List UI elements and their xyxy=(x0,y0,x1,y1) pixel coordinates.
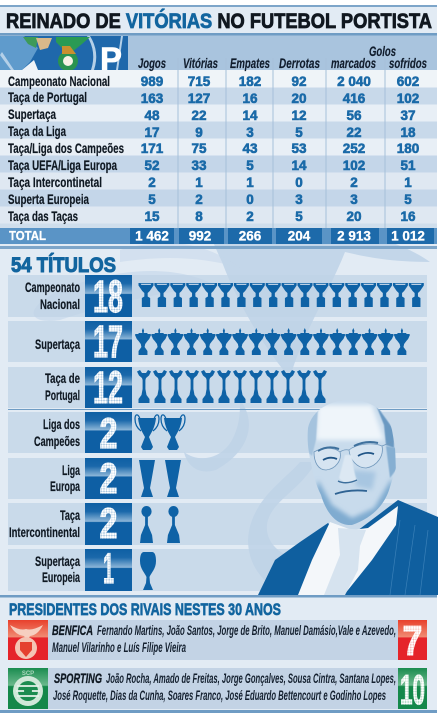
table row: Taça da Liga: 22 xyxy=(346,125,362,140)
table row: Supertaça: Supertaça xyxy=(8,106,56,122)
title row: Taça de Portugal 12 xyxy=(45,362,327,413)
table row: Taça da Liga xyxy=(8,123,416,140)
table row: Taça Intercontinetal: Taça Intercontinetal xyxy=(8,174,102,190)
table row: Superta Europeia: 3 xyxy=(295,192,303,207)
table row: Taça da Liga: 18 xyxy=(400,125,416,140)
title row: Liga Europa 2: 2 xyxy=(100,455,118,503)
title row: Taça Intercontinental 2 xyxy=(9,500,180,548)
table row: Superta Europeia: Superta Europeia xyxy=(8,191,89,207)
title row: Liga Europa 2: Europa xyxy=(50,478,80,494)
table row: Supertaça: 14 xyxy=(242,108,258,123)
table row: Taça de Portugal: 102 xyxy=(397,91,419,106)
panel: Sporting xyxy=(8,666,427,713)
title row: Liga dos Campeões 2: Campeões xyxy=(34,433,80,449)
title row: Liga dos Campeões 2: Liga dos xyxy=(43,416,80,432)
title row: Taça Intercontinental 2: 2 xyxy=(100,500,118,548)
table row: Superta Europeia xyxy=(8,191,412,207)
crest: Benfica xyxy=(8,620,48,660)
heading: presidents of rivals: PRESIDENTES DOS RIVAIS NESTES 30 ANOS xyxy=(9,600,281,619)
table column headers xyxy=(138,43,427,71)
table row: Taça/Liga dos Campeões: 252 xyxy=(343,141,365,156)
table row: Supertaça: 12 xyxy=(291,108,307,123)
table row: Taça UEFA/Liga Europa xyxy=(8,157,416,173)
title row: Campeonato Nacional 18 xyxy=(25,271,424,322)
table row: Taça Intercontinetal: 0 xyxy=(295,175,303,190)
table total row: 1 462 xyxy=(135,228,169,244)
table row: Supertaça: 22 xyxy=(191,108,207,123)
table row: Taça das Taças: Taça das Taças xyxy=(8,208,78,224)
table row: Superta Europeia: 5 xyxy=(404,192,412,207)
table row: Campeonato Nacional: 182 xyxy=(239,74,261,89)
crest: Sporting: SCP xyxy=(22,671,34,677)
table row: Taça Intercontinetal: 2 xyxy=(350,175,358,190)
table row: Taça UEFA/Liga Europa: 14 xyxy=(291,158,307,173)
table row: Taça UEFA/Liga Europa: 102 xyxy=(343,158,365,173)
title row: Liga Europa 2: Liga xyxy=(62,462,80,478)
title row: Taça Intercontinental 2: Taça xyxy=(60,507,80,523)
table row: Taça UEFA/Liga Europa: Taça UEFA/Liga Europa xyxy=(8,157,117,173)
table row: Taça de Portugal xyxy=(8,89,419,106)
table total row: 266 xyxy=(239,228,262,244)
table row: Taça da Liga: 5 xyxy=(295,125,303,140)
heading: 54 títulos: 54 TÍTULOS xyxy=(11,254,116,277)
table row: Superta Europeia: 2 xyxy=(195,192,203,207)
panel: Sporting: SPORTING xyxy=(54,670,102,686)
table row: Taça/Liga dos Campeões: 43 xyxy=(242,141,258,156)
table row: Campeonato Nacional: 715 xyxy=(188,74,211,89)
table row: Taça de Portugal: Taça de Portugal xyxy=(8,89,87,105)
table column headers: Empates xyxy=(230,55,270,71)
panel: Benfica xyxy=(8,617,427,664)
table row: Taça Intercontinetal: 2 xyxy=(148,175,156,190)
header image: club logo and P: P xyxy=(100,41,122,77)
table row: Taça de Portugal: 127 xyxy=(188,91,210,106)
table row: Taça UEFA/Liga Europa: 52 xyxy=(144,158,160,173)
table row: Taça da Liga: 9 xyxy=(195,125,203,140)
table row: Taça das Taças: 15 xyxy=(144,209,160,224)
table row: Superta Europeia: 3 xyxy=(350,192,358,207)
table row: Campeonato Nacional: 92 xyxy=(291,74,307,89)
table total row: 2 913 xyxy=(337,228,371,244)
table total row: TOTAL xyxy=(9,228,46,243)
table row: Supertaça: 37 xyxy=(400,108,416,123)
table total row: 1 012 xyxy=(391,228,425,244)
title row: Supertaça 17: Supertaça xyxy=(35,336,80,352)
table row: Taça das Taças: 8 xyxy=(195,209,203,224)
title row: Supertaça Europeia 1: 1 xyxy=(103,545,114,593)
title row: Campeonato Nacional 18: Nacional xyxy=(40,296,80,312)
table panel xyxy=(0,33,437,244)
table column headers: marcados xyxy=(331,55,376,71)
title row: Taça de Portugal 12: 12 xyxy=(93,362,123,413)
table rows striping xyxy=(0,58,437,228)
header image: club logo and P xyxy=(0,36,128,77)
title row: Taça de Portugal 12: Taça de xyxy=(45,370,80,386)
portrait: president in suit xyxy=(258,400,438,595)
table column headers: Jogos xyxy=(138,55,166,71)
title row: Taça Intercontinental 2: Intercontinental xyxy=(9,524,80,540)
title row: Supertaça Europeia 1: Europeia xyxy=(42,569,80,585)
table row: Taça de Portugal: 416 xyxy=(343,91,366,106)
table row: Taça/Liga dos Campeões: 171 xyxy=(141,141,164,156)
table row: Taça/Liga dos Campeões: 180 xyxy=(397,141,419,156)
title row: Liga dos Campeões 2: 2 xyxy=(100,410,118,458)
title row: Supertaça 17: 17 xyxy=(93,316,123,367)
crest: Sporting xyxy=(8,668,48,709)
title row: Campeonato Nacional 18: Campeonato xyxy=(25,279,80,295)
titles rows backgrounds xyxy=(8,275,427,591)
table row: Taça Intercontinetal: 1 xyxy=(195,175,203,190)
table row: Taça das Taças: 16 xyxy=(400,209,416,224)
table row: Supertaça: 48 xyxy=(144,108,160,123)
table row: Taça das Taças: 2 xyxy=(246,209,254,224)
title row: Supertaça 17 xyxy=(35,316,410,367)
table total row: 204 xyxy=(288,228,311,244)
table row: Taça UEFA/Liga Europa: 51 xyxy=(400,158,416,173)
table row: Superta Europeia: 0 xyxy=(246,192,254,207)
table row: Taça de Portugal: 20 xyxy=(291,91,307,106)
top rule xyxy=(0,5,437,7)
section rule xyxy=(0,246,437,249)
table header background xyxy=(0,33,437,70)
title row: Campeonato Nacional 18: 18 xyxy=(93,271,123,322)
title row: Liga dos Campeões 2 xyxy=(34,410,185,458)
table column headers: Derrotas xyxy=(279,55,320,71)
title row: Supertaça Europeia 1: Supertaça xyxy=(35,553,80,569)
section rule xyxy=(0,595,437,598)
table row: Taça Intercontinetal xyxy=(8,174,412,190)
title row: Supertaça Europeia 1 xyxy=(35,545,156,593)
table row: Campeonato Nacional xyxy=(8,73,419,89)
table row: Taça de Portugal: 16 xyxy=(242,91,258,106)
table row: Taça de Portugal: 163 xyxy=(141,91,164,106)
title row: Liga Europa 2 xyxy=(50,455,181,503)
table row: Taça da Liga: 17 xyxy=(144,125,160,140)
table row: Taça/Liga dos Campeões: 75 xyxy=(191,141,207,156)
dragon watermark xyxy=(34,130,430,594)
title row: Taça de Portugal 12: Portugal xyxy=(45,387,80,403)
panel: Benfica: BENFICA xyxy=(52,622,93,638)
table row: Taça/Liga dos Campeões: Taça/Liga dos Campeões xyxy=(8,140,124,156)
table row: Taça das Taças: 20 xyxy=(346,209,362,224)
table column headers: Golos xyxy=(369,43,396,59)
table row: Supertaça: 56 xyxy=(346,108,362,123)
bottom rule xyxy=(0,710,437,713)
panel: Benfica: 7 xyxy=(402,617,422,664)
table row: Campeonato Nacional: 602 xyxy=(397,74,419,89)
table row: Taça das Taças xyxy=(8,208,416,224)
table row: Taça da Liga: 3 xyxy=(246,125,254,140)
table row: Taça UEFA/Liga Europa: 33 xyxy=(191,158,207,173)
table column headers: sofridos xyxy=(389,55,427,71)
table row: Taça Intercontinetal: 1 xyxy=(246,175,254,190)
table row: Campeonato Nacional: 989 xyxy=(141,74,163,89)
table row: Campeonato Nacional: Campeonato Nacional xyxy=(8,73,110,89)
table row: Taça/Liga dos Campeões xyxy=(8,140,419,156)
table row: Taça das Taças: 5 xyxy=(295,209,303,224)
table row: Campeonato Nacional: 2 040 xyxy=(337,74,371,89)
table total row: 992 xyxy=(189,228,211,244)
table total row xyxy=(0,228,437,244)
panel: Benfica: Manuel Vilarinho e Luís Filipe Vieira xyxy=(52,639,186,655)
table row: Taça/Liga dos Campeões: 53 xyxy=(291,141,307,156)
table row: Taça UEFA/Liga Europa: 5 xyxy=(246,158,254,173)
table row: Taça Intercontinetal: 1 xyxy=(404,175,412,190)
table row: Superta Europeia: 5 xyxy=(148,192,156,207)
table column headers: Vitórias xyxy=(183,55,218,71)
table row: Supertaça xyxy=(8,106,416,123)
table row: Taça da Liga: Taça da Liga xyxy=(8,123,66,139)
